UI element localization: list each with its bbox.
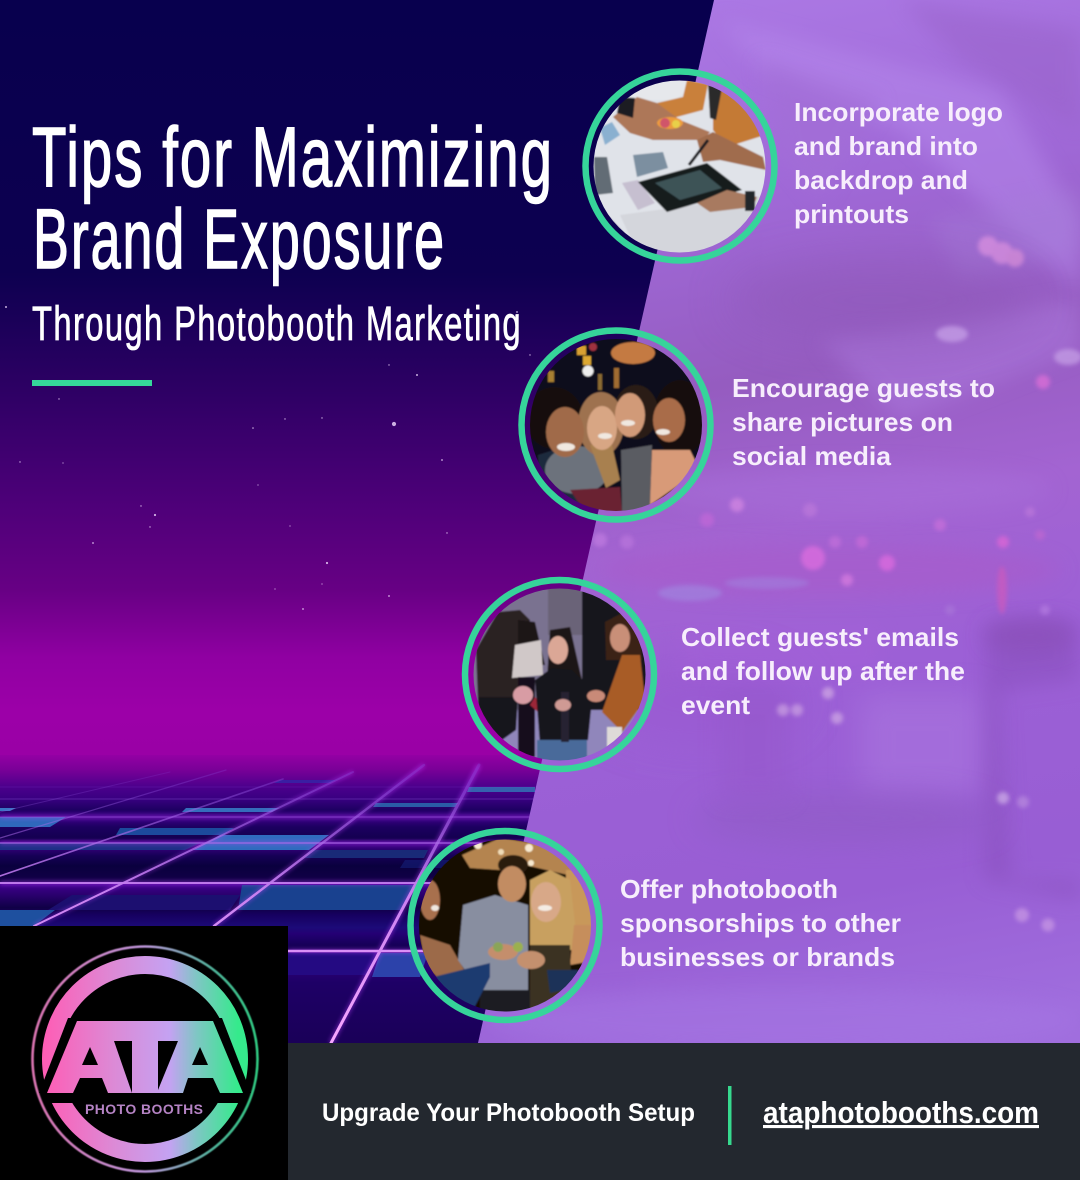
title (32, 110, 554, 286)
tip 4: sponsorship photo and text (410, 831, 901, 1020)
photo: hands working on tablet at table (590, 78, 770, 258)
accent bar (32, 380, 152, 386)
logo ATA letters (47, 1021, 243, 1093)
tip text: businesses or brands (620, 942, 895, 972)
tip text: Incorporate logo (794, 97, 1003, 127)
logo thick ring (51, 965, 239, 1153)
logo: ATA Photo Booths (0, 926, 288, 1180)
logo cut-outs around the letters (39, 1018, 251, 1103)
panel: blurred event venue background (470, 0, 1080, 1050)
ring (410, 831, 600, 1020)
tip 3: email collection photo and text (465, 580, 965, 770)
venue light beams and furniture shapes (480, 0, 1080, 1050)
tip text: Encourage guests to (732, 373, 995, 403)
photo: friends toasting drinks (419, 840, 591, 1012)
panel: footer bar (288, 1043, 1080, 1180)
call to action text: Upgrade Your Photobooth Setup (322, 1099, 695, 1127)
tip 2: social sharing photo and text (522, 330, 995, 520)
tip text: Collect guests' emails (681, 622, 959, 652)
stars (5, 306, 531, 610)
tip 1: brand photo and text (586, 72, 1003, 260)
tip text: social media (732, 441, 892, 471)
logo thin outer ring (32, 946, 258, 1172)
website link text: ataphotobooths.com (763, 1095, 1039, 1130)
ring (522, 330, 710, 520)
tip text: printouts (794, 199, 909, 229)
blue floor tiles (0, 780, 535, 977)
grid lines (0, 787, 540, 951)
tip text: sponsorships to other (620, 908, 901, 938)
tip text (681, 622, 965, 720)
photo: women with phones at event (474, 588, 646, 760)
tip text: and brand into (794, 131, 978, 161)
tip text (620, 874, 901, 972)
panel: neon perspective grid floor (0, 755, 560, 1043)
ring (465, 580, 654, 769)
tip text (794, 97, 1003, 229)
tip text: backdrop and (794, 165, 968, 195)
vertical divider (728, 1086, 732, 1145)
grid lines glow (0, 765, 540, 1043)
tip text: and follow up after the (681, 656, 965, 686)
title: Tips for Maximizing (32, 110, 554, 204)
tip text: share pictures on (732, 407, 953, 437)
tip text: event (681, 690, 750, 720)
title: Brand Exposure (33, 192, 446, 286)
ring (586, 72, 774, 260)
tip text (732, 373, 995, 471)
logo wordmark: PHOTO BOOTHS (85, 1101, 203, 1117)
photo: four friends taking selfie with confetti (530, 339, 702, 511)
tip text: Offer photobooth (620, 874, 838, 904)
subtitle: Through Photobooth Marketing (32, 298, 522, 351)
bokeh lights (593, 236, 1080, 932)
